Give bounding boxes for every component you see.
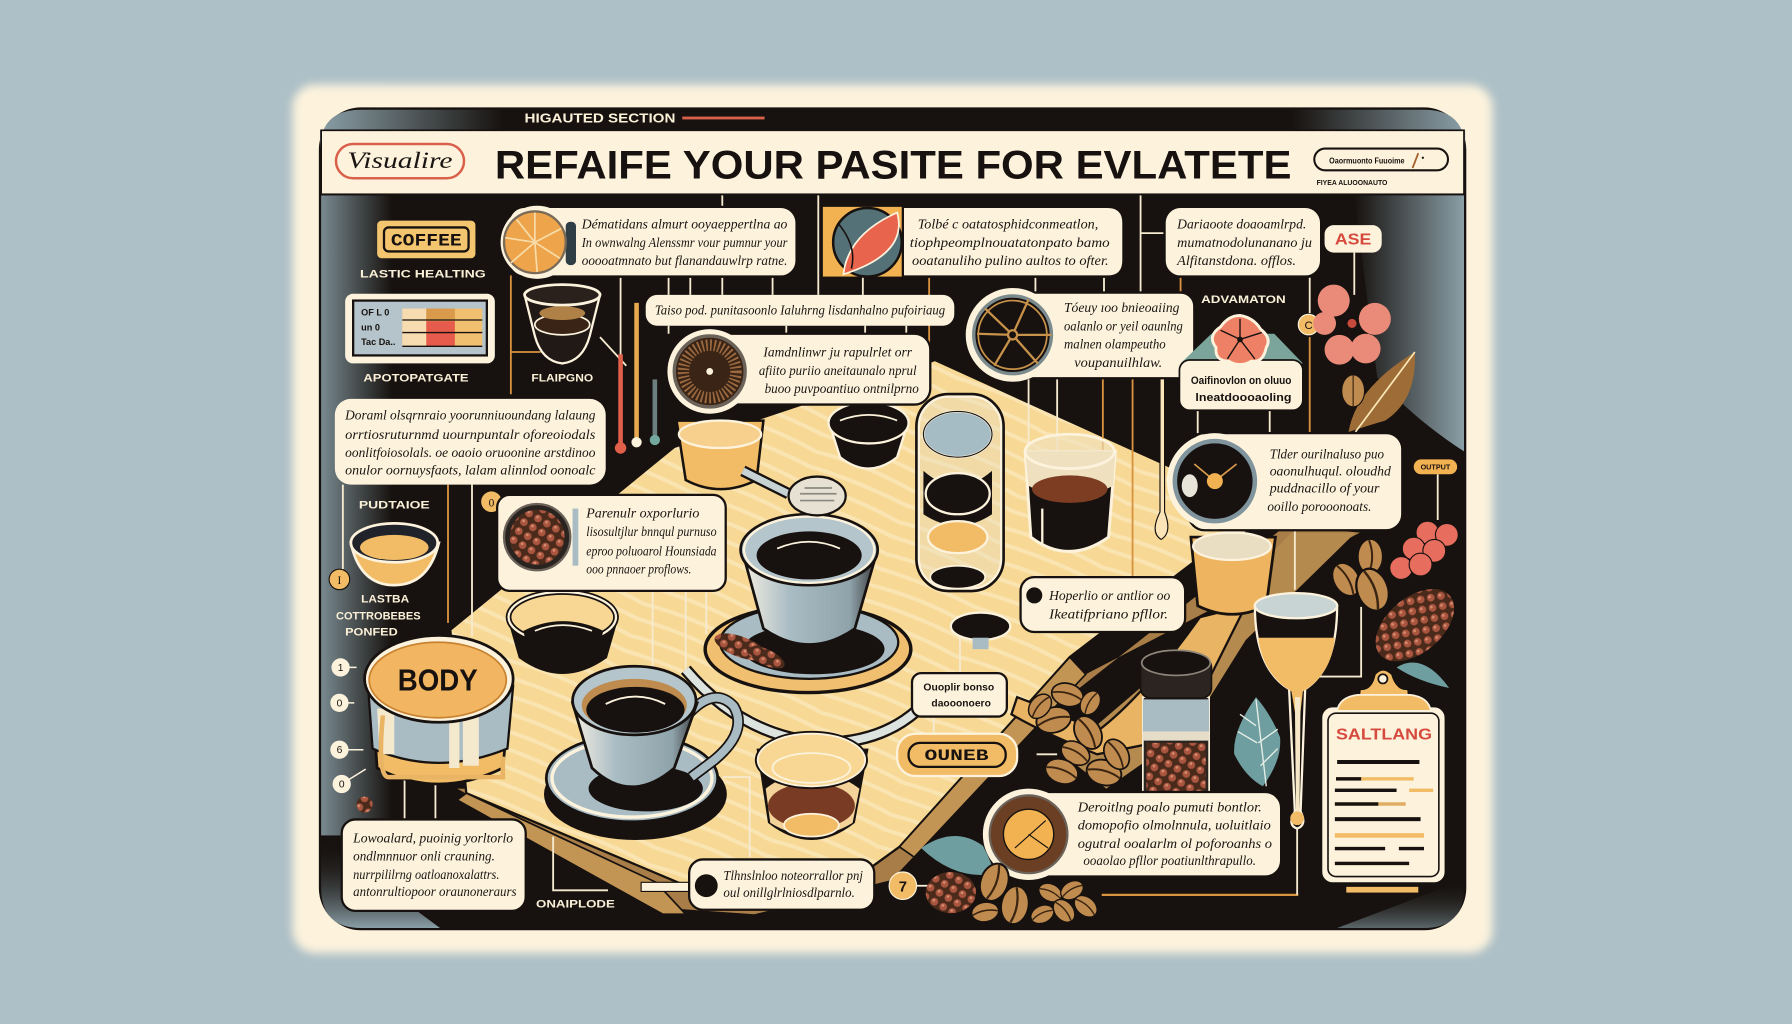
panel: callout top right: mumatnodolunanano ju xyxy=(1177,235,1312,250)
pudtaioe label: PUDTAIOE xyxy=(359,500,430,512)
long pill callout xyxy=(646,295,954,326)
main dark panel xyxy=(320,109,1465,929)
number badge xyxy=(481,491,502,512)
panel: callout bottom left xyxy=(342,819,526,911)
coffee tag xyxy=(377,221,475,258)
panel: callout bottom left: ondlmnnuor onli crauning. xyxy=(353,849,495,864)
ouneb pill: OUNEB xyxy=(925,747,989,765)
small orange tag xyxy=(1414,459,1457,474)
icon: leaf and bean xyxy=(1342,352,1415,432)
panel: callout roast circle: Deroitlng poalo pumuti bontlor. xyxy=(1077,799,1262,814)
body label: BODY xyxy=(398,662,478,697)
long pill callout: Taiso pod. punitasoonlo Ialuhrng lisdanhalno pufoiriaug xyxy=(655,302,945,317)
header band xyxy=(321,111,1464,194)
number seven badge xyxy=(889,872,935,899)
label advamaton: ADVAMATON xyxy=(1201,294,1286,306)
tray curve xyxy=(686,670,917,743)
panel: callout beans: ooo pnnaoer proflows. xyxy=(586,562,691,577)
icon: small leaf xyxy=(1397,663,1449,688)
panel: flower card: lneatdoooaoling xyxy=(1195,392,1291,404)
panel: callout citrus: ooooatmnato but flanandauwlrp ratne. xyxy=(582,253,787,268)
icon: bottom leaf xyxy=(921,836,994,875)
panel: callout bottom centre xyxy=(641,859,874,910)
panel: callout roast circle: domopofio olmolnnula, uoluitlaio xyxy=(1078,818,1271,833)
highlighted section rule xyxy=(682,117,765,119)
label lastba cottrobebes ponfed: PONFED xyxy=(345,626,398,638)
chart card xyxy=(345,294,495,363)
number badge xyxy=(329,569,350,590)
icon: jar of beans xyxy=(1141,650,1211,794)
icon: bottom berries xyxy=(926,872,976,913)
number c badge xyxy=(1298,314,1319,335)
bowl glass on table xyxy=(509,592,617,673)
number c badge: C xyxy=(1304,320,1313,332)
panel: small callout xyxy=(912,673,1007,717)
panel: callout roast circle xyxy=(983,789,1281,880)
panel: callout dark dot xyxy=(1021,577,1185,632)
label lastba cottrobebes ponfed: LASTBA xyxy=(361,593,409,605)
panel: small callout: daooonoero xyxy=(931,698,991,709)
panel: callout bottom left: nurrpililrng oatloanoxalattrs. xyxy=(353,867,499,882)
number seven badge: 7 xyxy=(899,879,907,895)
panel: callout wheel: malnen olampeutho xyxy=(1064,337,1166,352)
small orange tag: OUTPUT xyxy=(1421,463,1451,472)
panel: callout pie: ooatanuliho pulino aultos to ofter. xyxy=(912,253,1109,268)
highlighted section label: HIGAUTED SECTION xyxy=(525,111,675,125)
panel: callout pie: tiophpeomplnouatatonpato bamo xyxy=(910,235,1110,250)
ouneb pill xyxy=(897,734,1017,776)
search pill xyxy=(1314,149,1448,170)
panel: callout wheel xyxy=(966,288,1194,382)
panel: callout wheel: Tóeuy ıoo bnieoaiing xyxy=(1064,300,1180,315)
label onaiplode: ONAIPLODE xyxy=(536,898,615,910)
panel: callout lens: ooillo porooonoats. xyxy=(1267,499,1371,514)
icon: big teal leaf xyxy=(1234,697,1280,786)
small cherry xyxy=(357,797,373,813)
connector lines xyxy=(343,195,1438,895)
panel: callout pie xyxy=(823,207,1123,277)
chart card: OF L 0 xyxy=(361,307,389,317)
panel: callout beans: lisosultjlur bnnqul purnuso xyxy=(586,524,717,539)
tumbler with grounds xyxy=(1025,434,1115,551)
panel: callout wheel: oalanlo or yeil oaunlng xyxy=(1064,318,1183,333)
panel: small callout: Ouoplir bonso xyxy=(923,682,994,693)
center cup on saucer xyxy=(705,471,911,693)
label lastba cottrobebes ponfed xyxy=(336,593,421,638)
label lastic healting: LASTIC HEALTING xyxy=(360,269,486,281)
icon: pine cone xyxy=(1362,575,1468,676)
panel: callout grind: afiito puriio aneitaunalo nprul xyxy=(759,363,917,378)
panel: callout roast circle: ogutral ooalarlm ol poforoanhs o xyxy=(1078,836,1272,851)
small dark cup xyxy=(951,613,1010,649)
panel: flower card: Oaifinovlon on oluuo xyxy=(1191,375,1292,387)
panel: callout roast circle: ooaolao pfllor poatiunlthrapullo. xyxy=(1083,853,1256,868)
icon: red berries xyxy=(1390,521,1458,579)
title: REFAIFE YOUR PASITE FOR EVLATETE xyxy=(495,143,1291,187)
tall layered glass xyxy=(917,394,1003,591)
icon: berries blossom xyxy=(1313,285,1391,365)
ase tag: ASE xyxy=(1335,232,1372,249)
panel: callout top right xyxy=(1165,207,1321,277)
panel: callout bottom centre: Tlhnslnloo noteorrallor pnj xyxy=(723,868,863,883)
panel: long callout left: oonlitfoiosolals. oe oaoio oruoonine arstdinoo xyxy=(345,445,596,460)
panel: long callout left xyxy=(335,399,606,485)
thermometer sticks xyxy=(615,303,660,454)
search pill: Oaormuonto Fuuoime xyxy=(1329,155,1405,165)
panel: callout dark dot: Hoperlio or antlior oo xyxy=(1048,588,1170,603)
panel: callout grind xyxy=(667,329,930,414)
clipboard heading: SALTLANG xyxy=(1336,726,1432,743)
panel: callout lens: Tlder ourilnaluso puo xyxy=(1270,446,1384,461)
clipboard rows xyxy=(1335,760,1433,865)
coffee cherries on saucer xyxy=(711,628,788,673)
icon: flavor glass xyxy=(525,285,600,363)
label lastba cottrobebes ponfed: COTTROBEBES xyxy=(336,610,421,622)
panel: callout grind: Iamdnlinwr ju rapulrlet orr xyxy=(762,345,913,360)
numbered dots xyxy=(330,658,366,793)
numbered dots: 0 xyxy=(339,779,345,790)
panel: callout bottom left: antonrultiopoor oraunoneraurs xyxy=(353,884,517,899)
panel: callout citrus: In ownwalng Alenssmr vour pumnur your xyxy=(581,235,788,250)
clipboard foot bar xyxy=(1346,887,1418,893)
label apotopatgate: APOTOPATGATE xyxy=(363,373,469,385)
drip xyxy=(1155,377,1168,539)
glass with amber coffee xyxy=(677,421,763,489)
dark cup xyxy=(829,402,909,469)
panel: callout citrus: Dématidans almurt ooyaeppertlna ao xyxy=(581,217,788,232)
panel: callout pie: Tolbé c oatatosphidconmeatlon, xyxy=(918,217,1098,232)
visualire badge: Visualire xyxy=(347,148,453,173)
amber glass xyxy=(757,733,869,840)
panel: callout wheel: voupanuilhlaw. xyxy=(1074,355,1162,370)
panel: callout beans: eproo poluoarol Hounsiada xyxy=(586,543,717,558)
icon: coffee bean pile xyxy=(1024,680,1134,789)
icon: bottom beans xyxy=(970,860,1101,927)
wooden table xyxy=(450,360,1360,914)
panel: callout top right: Alfitanstdona. offlos. xyxy=(1176,253,1296,268)
paper card xyxy=(293,85,1493,953)
numbered dots: 1 xyxy=(338,663,344,674)
panel: long callout left: onulor oornuysfaots, lalam alinnlod oonoalc xyxy=(345,462,595,477)
panel: flower card xyxy=(1179,315,1303,410)
panel: long callout left: orrtiosruturnmd uournpuntalr oforeoiodals xyxy=(345,427,595,442)
tamper xyxy=(743,471,846,515)
chart card: un 0 xyxy=(361,322,380,332)
big coffee cup and saucer xyxy=(544,666,738,840)
panel: callout lens: oaonulhuqul. oloudhd xyxy=(1270,463,1391,478)
panel: callout bottom centre: oul onillglrlniosdlparnlo. xyxy=(723,885,855,900)
number badge: 0 xyxy=(489,497,495,509)
panel: callout grind: buoo puvpoantiuo ontnilprno xyxy=(765,381,919,396)
body drum xyxy=(365,635,513,784)
icon: tasting bowl xyxy=(351,523,439,585)
panel: callout dark dot: Ikeatifpriano pfllor. xyxy=(1048,606,1168,621)
panel: callout lens: puddnacillo of your xyxy=(1269,481,1380,496)
numbered dots: 0 xyxy=(337,698,343,709)
header note: FIYEA ALUOONAUTO xyxy=(1317,178,1388,187)
panel: callout citrus xyxy=(501,206,797,279)
chart card: Tac Da.. xyxy=(361,337,395,347)
panel: clipboard xyxy=(1321,670,1446,883)
orange glass xyxy=(1191,533,1275,614)
number badge: I xyxy=(338,575,342,587)
label flaipgno: FLAIPGNO xyxy=(531,373,593,385)
panel: long callout left: Doraml olsqrnraio yoorunniuoundang lalaung xyxy=(344,407,596,422)
icon: wine glass xyxy=(1255,593,1337,829)
panel: callout lens xyxy=(1167,433,1402,530)
visualire badge xyxy=(336,144,464,178)
ase tag xyxy=(1325,225,1382,253)
panel: callout beans xyxy=(497,495,726,591)
panel: callout top right: Dariaoote doaoamlrpd. xyxy=(1176,217,1306,232)
icon: golden beans xyxy=(1327,539,1394,615)
numbered dots: 6 xyxy=(337,745,343,756)
panel: callout bottom left: Lowoalard, puoinig yorltorlo xyxy=(352,830,513,845)
coffee tag: COFFEE xyxy=(391,233,462,252)
panel: callout beans: Parenulr oxporlurio xyxy=(585,506,700,521)
icon: flower xyxy=(1212,315,1268,365)
